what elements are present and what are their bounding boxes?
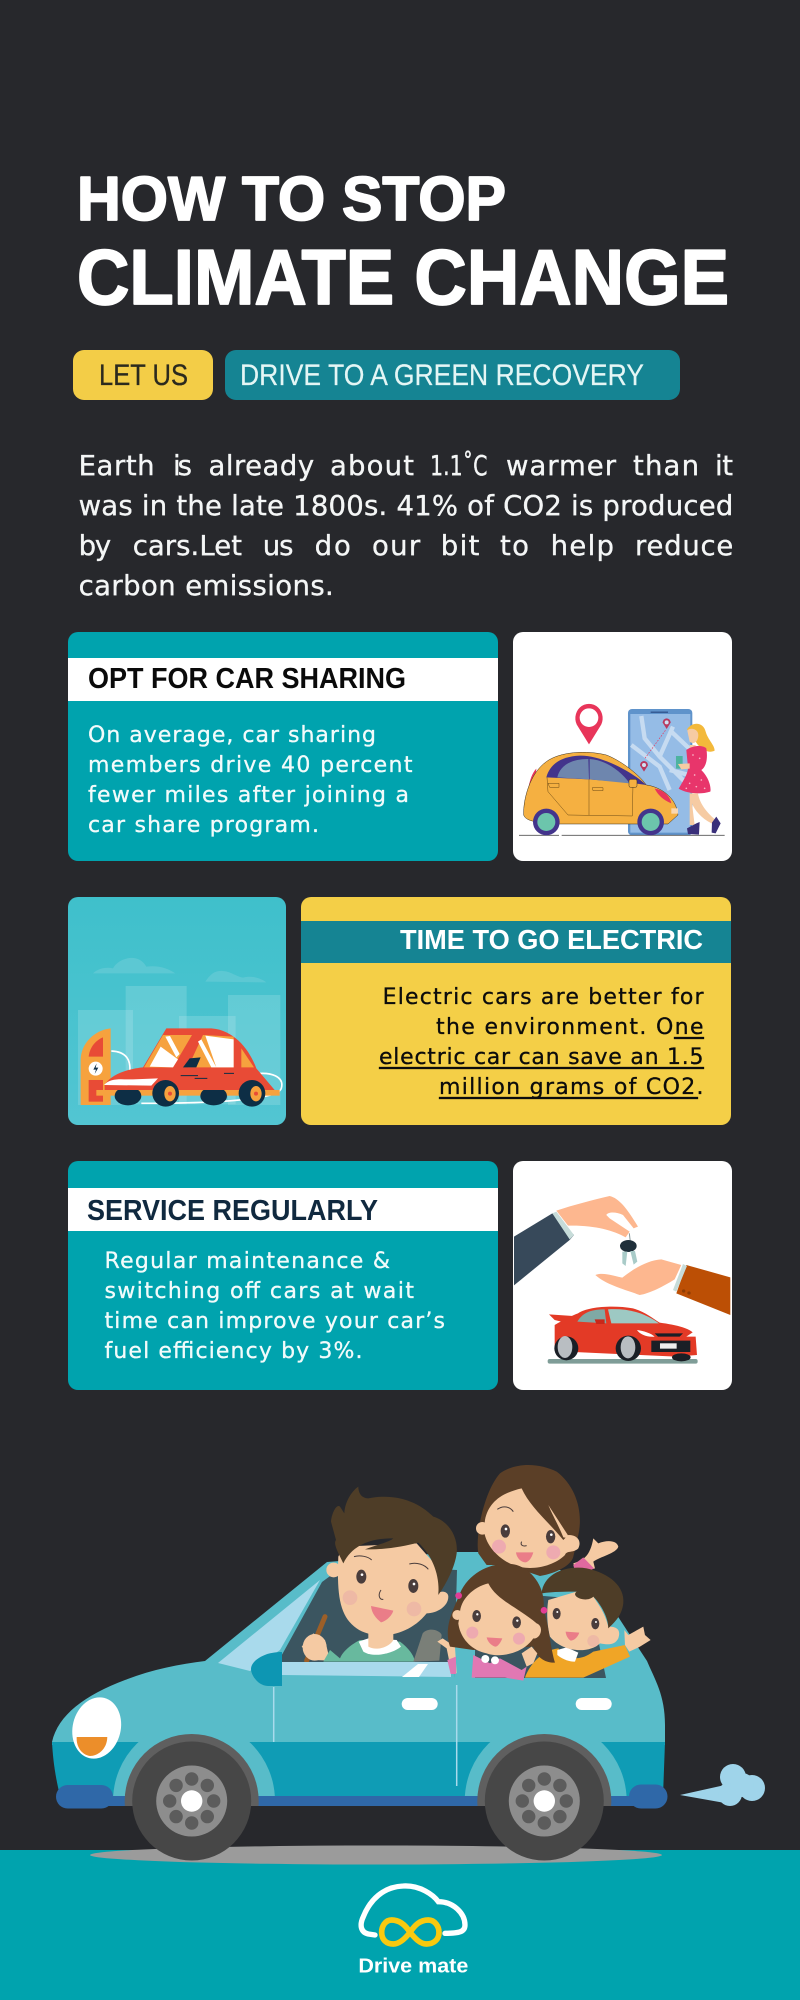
heading: time to go electric: TIME TO GO ELECTRIC: [400, 924, 703, 955]
icon: charging station: [81, 1028, 111, 1105]
car lower band: [52, 1742, 665, 1796]
intro paragraph: by: [79, 530, 111, 562]
icon: location pin: [575, 704, 603, 744]
panel: opt for car sharing: [68, 632, 498, 861]
logo wordmark: Drive mate: [358, 1956, 468, 1978]
intro paragraph: bit: [441, 530, 480, 562]
icon: receiving hand: [595, 1259, 730, 1315]
panel: service regularly: [68, 1161, 498, 1390]
title: [77, 165, 729, 321]
rear wheel: [464, 1734, 626, 1860]
intro paragraph: Earth: [79, 450, 155, 482]
logo: drive mate: [358, 1886, 468, 1978]
intro paragraph: carbon emissions.: [79, 570, 334, 602]
body: service text: fuel efficiency by 3%.: [104, 1339, 362, 1364]
rear bumper: [629, 1784, 668, 1808]
icon: infinity: [382, 1920, 439, 1944]
window glass bar: [282, 1662, 451, 1677]
family: boy: [525, 1568, 651, 1678]
intro paragraph: do: [315, 530, 351, 562]
body: service text: switching off cars at wait: [104, 1279, 414, 1304]
panel: car keys illustration: [513, 1161, 732, 1390]
intro paragraph: warmer: [506, 450, 617, 482]
icon: yellow car: [524, 752, 678, 835]
pill: drive to a green recovery: [225, 350, 680, 400]
car interior: [278, 1565, 606, 1678]
intro paragraph: is: [173, 450, 192, 482]
body: car sharing text: On average, car sharing: [88, 723, 376, 748]
intro paragraph: cars.Let: [133, 530, 242, 562]
body: car sharing text: fewer miles after joining a: [88, 783, 409, 808]
icon: red car: [96, 1028, 280, 1107]
family: father: [302, 1487, 457, 1662]
panel: car sharing illustration: [513, 632, 732, 861]
intro paragraph: than: [633, 450, 699, 482]
intro paragraph: our: [372, 530, 421, 562]
panel: time to go electric: [301, 897, 731, 1125]
body: car sharing text: members drive 40 percent: [88, 753, 413, 778]
family: mother: [476, 1465, 618, 1578]
panel: electric car illustration: [68, 897, 286, 1125]
title: CLIMATE CHANGE: [77, 233, 729, 321]
buildings: [78, 986, 280, 1105]
car upper body: [52, 1552, 665, 1745]
car shadow: [90, 1846, 662, 1864]
pill: let us: [73, 350, 213, 400]
door lines: [274, 1685, 457, 1786]
body: car sharing text: car share program.: [88, 813, 319, 838]
windshield: [218, 1580, 320, 1671]
intro paragraph: help: [551, 530, 614, 562]
heading: service regularly: SERVICE REGULARLY: [87, 1195, 378, 1227]
front bumper: [56, 1785, 113, 1808]
pill: let us: LET US: [99, 359, 188, 392]
body: electric car text: the environment. One: [436, 1015, 704, 1040]
intro paragraph: [79, 450, 733, 602]
body: car sharing text: [88, 723, 413, 838]
body: electric car text: Electric cars are better for: [383, 985, 705, 1010]
body: electric car text: electric car can save an 1.5: [379, 1045, 704, 1070]
front wheel: [113, 1734, 275, 1860]
intro paragraph: to: [500, 530, 529, 562]
intro paragraph: already: [208, 450, 314, 482]
body: electric car text: million grams of CO2.: [439, 1075, 704, 1100]
body: service text: Regular maintenance &: [104, 1249, 390, 1274]
icon: hand holding keys: [514, 1196, 638, 1285]
intro paragraph: it: [715, 450, 733, 482]
title: HOW TO STOP: [77, 165, 506, 234]
door handles: [402, 1698, 612, 1710]
ground line: [519, 834, 725, 836]
body: electric car text: [379, 985, 705, 1100]
intro paragraph: reduce: [635, 530, 733, 562]
pill: drive to a green recovery: DRIVE TO A GREEN RECOVERY: [240, 359, 644, 392]
illustration: family car: [52, 1465, 765, 1882]
body: service text: [104, 1249, 445, 1364]
intro paragraph: about: [330, 450, 414, 482]
icon: woman: [676, 724, 721, 835]
headlight: [66, 1692, 127, 1764]
icon: phone with map: [628, 709, 692, 835]
side strip: [100, 1796, 640, 1806]
heading: opt for car sharing: OPT FOR CAR SHARING: [88, 663, 406, 695]
family: girl: [437, 1564, 555, 1681]
intro paragraph: was in the late 1800s. 41% of CO2 is produced: [79, 490, 733, 522]
clouds: [93, 958, 266, 982]
intro paragraph: us: [263, 530, 293, 562]
charging cable: [111, 1051, 282, 1103]
icon: car outline: [361, 1886, 465, 1935]
body: service text: time can improve your car’s: [104, 1309, 445, 1334]
icon: red sports car: [548, 1307, 698, 1364]
footer band: [0, 1850, 800, 2000]
exhaust cloud: [680, 1764, 765, 1806]
mirror: [251, 1652, 282, 1686]
intro paragraph: 1.1˚C: [430, 450, 488, 482]
